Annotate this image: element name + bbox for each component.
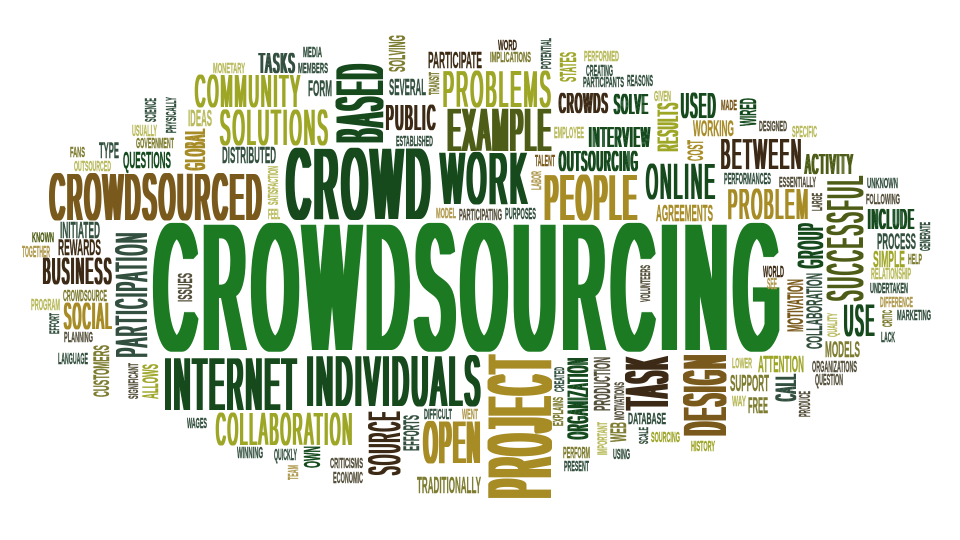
word cloud: crowdsourcing: IDEAS bbox=[188, 105, 212, 131]
word cloud: crowdsourcing: OUTSOURCED bbox=[74, 158, 111, 175]
word cloud: crowdsourcing: WIRED bbox=[735, 98, 761, 126]
word cloud: crowdsourcing: PARTICIPATING bbox=[459, 207, 502, 224]
word cloud: crowdsourcing: FREE bbox=[748, 393, 768, 418]
word cloud: crowdsourcing: ORGANIZATIONS bbox=[812, 359, 857, 376]
word cloud: crowdsourcing: PUBLIC bbox=[386, 97, 437, 138]
word cloud: crowdsourcing: WORKING bbox=[693, 116, 734, 141]
word cloud: crowdsourcing: SUPPORT bbox=[730, 370, 769, 396]
word cloud: crowdsourcing: WORD bbox=[498, 37, 517, 54]
word cloud: crowdsourcing: OWN bbox=[299, 446, 325, 468]
word cloud: crowdsourcing: SPECIFIC bbox=[792, 124, 817, 141]
word cloud: crowdsourcing: PEOPLE bbox=[545, 161, 639, 234]
word cloud: crowdsourcing: PROGRAM bbox=[31, 297, 60, 314]
word cloud: crowdsourcing: ESSENTIALLY bbox=[779, 174, 816, 191]
word cloud: crowdsourcing: ORGANIZATION bbox=[562, 357, 595, 439]
word cloud: crowdsourcing: USE bbox=[844, 295, 876, 346]
word cloud: crowdsourcing: TOGETHER bbox=[22, 244, 50, 261]
word cloud: crowdsourcing: FORM bbox=[308, 76, 332, 101]
word cloud: crowdsourcing: SCIENCE bbox=[143, 98, 160, 122]
word cloud: crowdsourcing: MONETARY bbox=[213, 60, 245, 77]
word cloud: crowdsourcing: PHYSICALLY bbox=[163, 97, 180, 133]
word cloud: crowdsourcing: SOLVE bbox=[614, 89, 649, 121]
word cloud: crowdsourcing: SATISFACTION bbox=[265, 166, 282, 205]
word cloud: crowdsourcing: MADE bbox=[721, 97, 737, 114]
word cloud: crowdsourcing: MEMBERS bbox=[298, 60, 328, 77]
word cloud: crowdsourcing: LOWER bbox=[732, 355, 752, 372]
word cloud: crowdsourcing: WENT bbox=[462, 406, 478, 423]
word cloud: crowdsourcing: OPEN bbox=[424, 409, 482, 476]
word cloud: crowdsourcing: INDIVIDUALS bbox=[307, 342, 483, 422]
word cloud: crowdsourcing: TRANSIT bbox=[426, 72, 443, 95]
word cloud: crowdsourcing: AGREEMENTS bbox=[656, 200, 713, 226]
word cloud: crowdsourcing: HISTORY bbox=[691, 438, 715, 455]
word cloud: crowdsourcing: USUALLY bbox=[132, 123, 157, 140]
word cloud: crowdsourcing: UNKNOWN bbox=[867, 175, 898, 192]
word cloud: crowdsourcing: LANGUAGE bbox=[58, 351, 88, 368]
word cloud: crowdsourcing: EMPLOYEE bbox=[554, 125, 584, 142]
word cloud: crowdsourcing: ECONOMIC bbox=[333, 470, 363, 487]
word cloud: crowdsourcing: PERFORMANCES bbox=[724, 171, 771, 188]
word cloud: crowdsourcing: MODELS bbox=[825, 337, 860, 362]
word cloud: crowdsourcing: GLOBAL bbox=[180, 128, 212, 170]
word cloud: crowdsourcing: SEVERAL bbox=[389, 74, 426, 100]
word cloud: crowdsourcing: ESTABLISHED bbox=[396, 133, 433, 150]
word cloud: crowdsourcing: DATABASE bbox=[628, 411, 666, 428]
word cloud: crowdsourcing: SOURCING bbox=[651, 429, 680, 446]
word cloud: crowdsourcing: PRESENT bbox=[564, 458, 589, 475]
word cloud: crowdsourcing: PURPOSES bbox=[505, 206, 536, 223]
word cloud: crowdsourcing: IMPORTANT bbox=[594, 422, 610, 455]
word cloud: crowdsourcing: CROWD bbox=[287, 127, 434, 241]
word cloud: crowdsourcing: EXPLAINS bbox=[550, 397, 567, 426]
word cloud: crowdsourcing: REASONS bbox=[627, 73, 653, 90]
word cloud: crowdsourcing: GENERATE bbox=[917, 222, 934, 251]
word cloud: crowdsourcing: MEDIA bbox=[303, 44, 322, 61]
word cloud: crowdsourcing: ALLOWS bbox=[138, 364, 163, 399]
word cloud: crowdsourcing: TRADITIONALLY bbox=[417, 472, 481, 498]
word cloud: crowdsourcing: QUICKLY bbox=[274, 447, 297, 464]
word cloud: crowdsourcing: SCALE bbox=[636, 427, 651, 444]
word cloud: crowdsourcing: TALENT bbox=[535, 153, 555, 170]
word cloud: crowdsourcing: QUESTIONS bbox=[123, 147, 171, 173]
word cloud: crowdsourcing: GIVEN bbox=[654, 88, 671, 105]
word cloud: crowdsourcing: QUESTION bbox=[815, 372, 843, 389]
word cloud: crowdsourcing: SIGNIFICANT bbox=[125, 363, 141, 399]
word cloud: crowdsourcing: WAY bbox=[732, 393, 746, 410]
word cloud: crowdsourcing: QUALITY bbox=[824, 313, 840, 337]
word cloud: crowdsourcing: EXAMPLE bbox=[448, 96, 553, 164]
word cloud: crowdsourcing: USING bbox=[613, 446, 630, 463]
word cloud: crowdsourcing: USED bbox=[681, 85, 717, 126]
word cloud: crowdsourcing: EFFORT bbox=[46, 313, 62, 334]
word cloud: crowdsourcing: SIMPLE bbox=[873, 246, 905, 272]
word cloud: crowdsourcing: PLANNING bbox=[64, 329, 93, 346]
word cloud: crowdsourcing: WEB bbox=[606, 422, 631, 442]
word cloud: crowdsourcing: DESIGNED bbox=[759, 118, 787, 135]
word cloud: crowdsourcing: ATTENTION bbox=[758, 351, 804, 377]
word cloud: crowdsourcing: CROWDS bbox=[559, 88, 609, 120]
word cloud: crowdsourcing: GOVERNMENT bbox=[136, 135, 174, 152]
word cloud: crowdsourcing: COST bbox=[683, 140, 708, 161]
word cloud: crowdsourcing: BUSINESS bbox=[43, 251, 113, 293]
word cloud: crowdsourcing: CALL bbox=[770, 373, 803, 401]
word cloud: crowdsourcing: ONLINE bbox=[646, 153, 717, 210]
word cloud: crowdsourcing: EFFORTS bbox=[399, 415, 424, 451]
word cloud: crowdsourcing: PARTICIPANTS bbox=[583, 74, 624, 91]
word cloud: crowdsourcing: KNOWN bbox=[32, 229, 54, 245]
word cloud: crowdsourcing: LACK bbox=[881, 329, 895, 346]
word cloud: crowdsourcing: PRODUCTION bbox=[589, 357, 615, 411]
word cloud: crowdsourcing: CUSTOMERS bbox=[89, 345, 114, 397]
word cloud: crowdsourcing: ISSUES bbox=[175, 273, 197, 302]
word cloud: crowdsourcing: OUTSOURCING bbox=[559, 146, 639, 178]
word cloud: crowdsourcing: LABOR bbox=[528, 171, 544, 190]
word cloud: crowdsourcing: CRITIC bbox=[879, 310, 895, 327]
word cloud: crowdsourcing: SOLUTIONS bbox=[220, 99, 330, 156]
word cloud: crowdsourcing: SOCIAL bbox=[64, 296, 113, 338]
word cloud: crowdsourcing: CREATED bbox=[551, 367, 567, 392]
word cloud: crowdsourcing: MOTIVATIONS bbox=[611, 382, 627, 420]
word cloud: crowdsourcing: CROWDSOURCED bbox=[50, 160, 264, 235]
word cloud: crowdsourcing: PARTICIPATE bbox=[428, 47, 482, 73]
word cloud: crowdsourcing: PERFORM bbox=[563, 445, 590, 462]
word cloud: crowdsourcing: COLLABORATION bbox=[802, 273, 827, 349]
word cloud: crowdsourcing: PERFORMED bbox=[584, 48, 619, 65]
word cloud: crowdsourcing: WORK bbox=[441, 137, 530, 220]
word cloud: crowdsourcing: COLLABORATION bbox=[216, 403, 354, 455]
word cloud: crowdsourcing: INTERNET bbox=[165, 342, 299, 426]
word cloud: crowdsourcing: VOLUNTEERS bbox=[637, 265, 653, 302]
word cloud: crowdsourcing: DESIGN bbox=[671, 353, 739, 435]
word cloud: crowdsourcing: HELP bbox=[908, 251, 922, 268]
word cloud: crowdsourcing: REWARDS bbox=[58, 235, 101, 260]
word cloud: crowdsourcing: TEAM bbox=[285, 465, 302, 480]
word cloud: crowdsourcing: SOURCE bbox=[359, 410, 410, 475]
word cloud: crowdsourcing: CRITICISMS bbox=[330, 455, 363, 472]
word cloud: crowdsourcing: LARGE bbox=[809, 193, 826, 211]
word cloud: crowdsourcing: DISTRIBUTED bbox=[222, 142, 276, 168]
word cloud: crowdsourcing: SEE bbox=[767, 276, 777, 293]
word cloud: crowdsourcing: PRODUCE bbox=[797, 391, 814, 417]
word cloud: crowdsourcing: CREATING bbox=[586, 63, 613, 80]
word cloud: crowdsourcing: MOTIVATION bbox=[783, 279, 808, 332]
word cloud: crowdsourcing: TASKS bbox=[259, 48, 296, 80]
word cloud: crowdsourcing: COMMUNITY bbox=[195, 65, 302, 117]
word cloud: crowdsourcing: FOLLOWING bbox=[866, 191, 900, 208]
word cloud: crowdsourcing: FANS bbox=[70, 144, 85, 161]
word cloud: crowdsourcing: CROWDSOURCE bbox=[63, 288, 107, 305]
word cloud: crowdsourcing: WINNING bbox=[237, 445, 263, 462]
word cloud: crowdsourcing: INITIATED bbox=[60, 217, 100, 243]
word cloud: crowdsourcing: MODEL bbox=[436, 205, 456, 222]
word cloud: crowdsourcing: WORLD bbox=[763, 264, 784, 281]
word cloud: crowdsourcing: DIFFICULT bbox=[424, 406, 452, 423]
word cloud: crowdsourcing: IMPLICATIONS bbox=[490, 49, 531, 66]
word cloud: crowdsourcing: TYPE bbox=[99, 138, 119, 163]
word cloud: crowdsourcing: WAGES bbox=[187, 415, 207, 432]
word cloud: crowdsourcing: INTERVIEW bbox=[589, 122, 651, 154]
word cloud: crowdsourcing: TASK bbox=[613, 355, 681, 409]
word cloud: crowdsourcing: FEEL bbox=[268, 206, 280, 223]
word cloud: crowdsourcing: GROUP bbox=[790, 222, 831, 268]
word cloud: crowdsourcing: PROBLEMS bbox=[443, 61, 553, 119]
